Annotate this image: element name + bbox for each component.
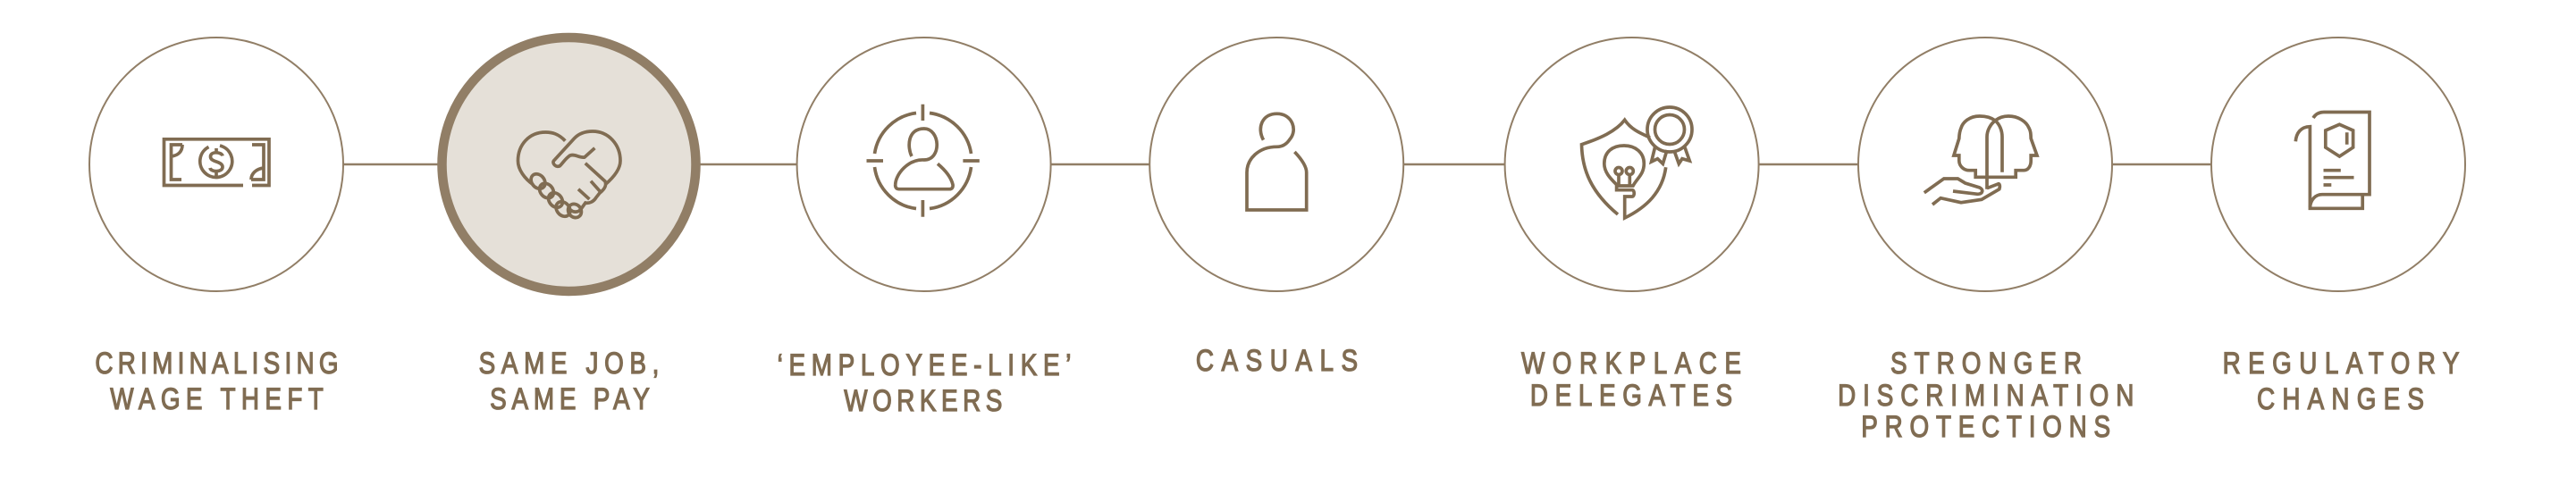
label [1838, 346, 2134, 444]
step: stronger discrimination protections [1838, 38, 2134, 444]
label: CASUALS [1196, 343, 1358, 378]
step: employee-like workers [778, 38, 1071, 418]
icon: book with shield [2295, 113, 2370, 208]
connector: 3 to 4 [1051, 163, 1149, 165]
label: WORKPLACE [1521, 346, 1741, 381]
step: casuals [1149, 38, 1403, 378]
circle [1505, 38, 1759, 291]
label: PROTECTIONS [1861, 409, 2110, 444]
label: DELEGATES [1530, 378, 1732, 413]
label: STRONGER [1890, 346, 2082, 381]
label: DISCRIMINATION [1838, 378, 2134, 413]
icon: handshake heart [518, 131, 620, 221]
icon: two heads over hand [1924, 116, 2037, 205]
label: WAGE THEFT [110, 381, 324, 416]
circle [442, 38, 695, 291]
icon: banknote [164, 139, 269, 186]
step: regulatory changes [2211, 38, 2465, 416]
connector: 6 to 7 [2113, 163, 2210, 165]
label: CRIMINALISING [95, 346, 339, 381]
step: same job, same pay (highlighted) [442, 38, 695, 416]
label [1521, 346, 1741, 413]
step: criminalising wage theft [89, 38, 343, 416]
label [778, 347, 1071, 418]
circle [89, 38, 343, 291]
label: REGULATORY [2223, 346, 2460, 381]
label: CHANGES [2257, 381, 2424, 416]
label [479, 346, 659, 416]
icon: shield, bulb and medal [1582, 107, 1692, 218]
step: workplace delegates [1505, 38, 1759, 413]
connector: 4 to 5 [1404, 163, 1504, 165]
icon: person [1247, 113, 1307, 210]
label: ‘EMPLOYEE-LIKE’ [778, 347, 1071, 382]
connector: 1 to 2 [343, 163, 438, 165]
connector: 5 to 6 [1759, 163, 1858, 165]
circle [1149, 38, 1403, 291]
connector: 2 to 3 [700, 163, 796, 165]
circle [797, 38, 1051, 291]
label [95, 346, 339, 416]
icon: person in target [867, 105, 980, 217]
label: SAME PAY [490, 381, 650, 416]
label: SAME JOB, [479, 346, 659, 381]
label [2223, 346, 2460, 416]
circle [1858, 38, 2112, 291]
circle [2211, 38, 2465, 291]
label: WORKERS [844, 383, 1002, 418]
